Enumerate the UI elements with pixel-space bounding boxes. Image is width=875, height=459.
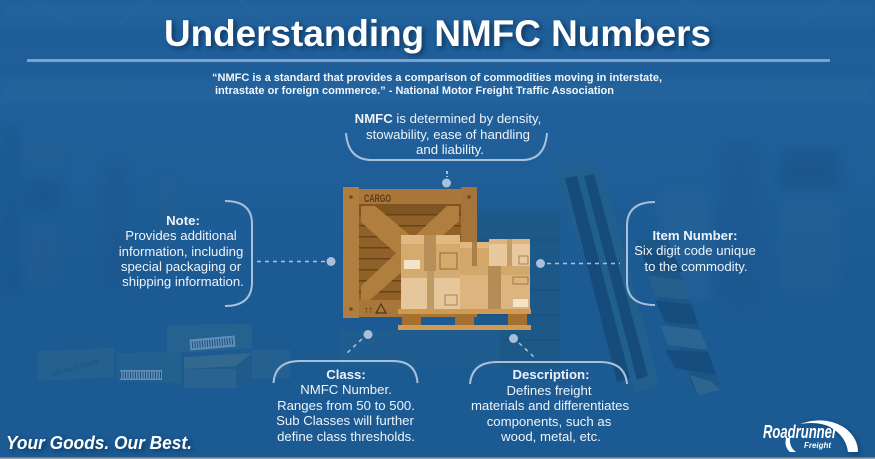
callout: NMFC determination: stowability, ease of handling bbox=[366, 127, 530, 142]
callout: item number: Six digit code unique bbox=[634, 243, 756, 258]
logo: Roadrunner Freight: Freight bbox=[804, 441, 831, 450]
quote: “NMFC is a standard that provides a comparison of commodities moving in interstate, bbox=[212, 72, 662, 84]
callout: class: define class thresholds. bbox=[277, 429, 415, 444]
callout: NMFC determination: NMFC is determined by density, bbox=[355, 111, 541, 126]
bottom edge bbox=[0, 458, 875, 459]
callout: note: Provides additional bbox=[125, 228, 237, 243]
callout: note bbox=[119, 201, 336, 306]
background boxes on the floor bbox=[37, 324, 290, 388]
callout: class bbox=[274, 330, 418, 444]
callout: description: Defines freight bbox=[506, 383, 592, 398]
title: Understanding NMFC Numbers bbox=[166, 15, 714, 56]
callout: class: Sub Classes will further bbox=[276, 413, 414, 428]
quote bbox=[212, 72, 662, 97]
callout: item number bbox=[536, 202, 756, 305]
title: Understanding NMFC Numbers bbox=[164, 13, 711, 54]
callout: note: Note: bbox=[166, 213, 200, 228]
callout: class: Class: bbox=[326, 367, 366, 382]
callout: note: information, including bbox=[119, 244, 243, 259]
logo: Roadrunner Freight bbox=[763, 420, 860, 454]
icon: wooden cargo crate: CARGO bbox=[364, 193, 391, 205]
icon: wooden cargo crate: ↑↑ bbox=[364, 305, 373, 316]
callout: class: Ranges from 50 to 500. bbox=[277, 398, 415, 413]
callout: description: components, such as bbox=[487, 414, 612, 429]
background boxes on the floor: DO NOT DROP bbox=[52, 359, 101, 378]
logo: Roadrunner Freight: Roadrunner bbox=[763, 422, 838, 442]
tagline: Your Goods. Our Best. bbox=[9, 435, 195, 455]
icon: wooden cargo crate bbox=[343, 187, 477, 318]
callout: NMFC determination bbox=[346, 111, 547, 188]
callout: note: special packaging or bbox=[121, 259, 242, 274]
callout: NMFC determination: and liability. bbox=[416, 142, 484, 157]
callout: description bbox=[470, 334, 629, 444]
title divider bbox=[27, 59, 830, 62]
callout: description: Description: bbox=[513, 367, 589, 382]
callout: note: shipping information. bbox=[122, 274, 244, 289]
callout: class: NMFC Number. bbox=[300, 382, 392, 397]
callout: item number: Item Number: bbox=[652, 228, 738, 243]
icon: cardboard boxes on pallet bbox=[398, 235, 531, 330]
quote: intrastate or foreign commerce.” - National Motor Freight Traffic Association bbox=[215, 85, 614, 97]
callout: description: wood, metal, etc. bbox=[500, 429, 601, 444]
callout: description: materials and differentiates bbox=[471, 398, 629, 413]
callout: item number: to the commodity. bbox=[644, 259, 748, 274]
tagline: Your Goods. Our Best. bbox=[6, 433, 192, 453]
background wooden pallets leaning bbox=[553, 160, 720, 395]
background stacked cargo crates bbox=[340, 212, 560, 368]
